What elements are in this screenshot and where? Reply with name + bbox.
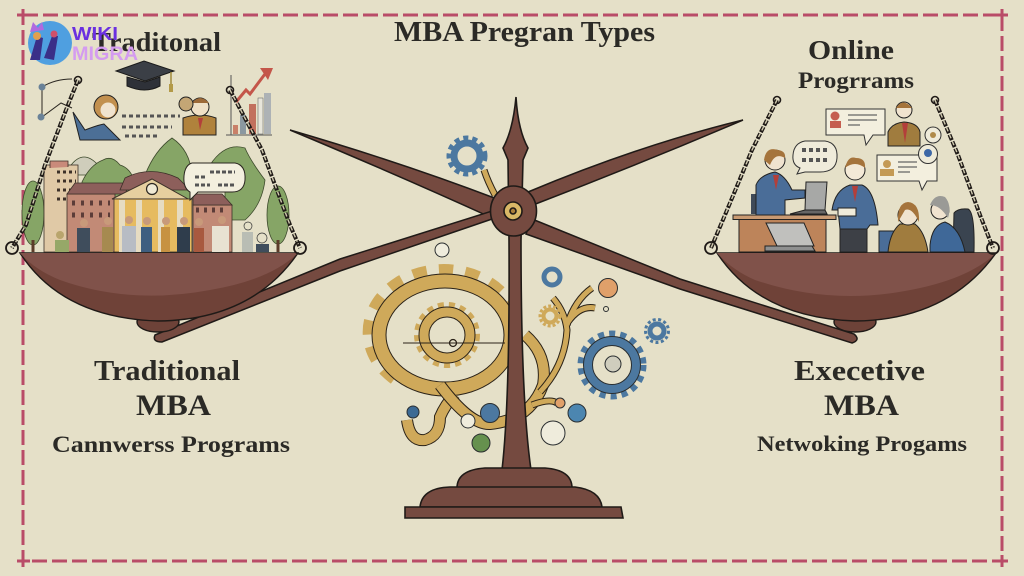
left chains: [6, 76, 306, 254]
bar chart with arrow: [226, 75, 272, 135]
bubble: chat: [793, 141, 837, 174]
red buildings: [67, 194, 115, 252]
gold gears and vines: [370, 170, 595, 440]
right pan: [717, 253, 996, 332]
heading: online programs: Progrrams: [798, 68, 914, 93]
title: MBA Pregran Types: [394, 17, 655, 48]
man with gear: [183, 115, 216, 135]
heading: executive MBA: Execetive: [794, 356, 925, 387]
bubble: profile two: [877, 155, 937, 190]
woman: [73, 112, 120, 140]
heading: traditional MBA: [52, 356, 290, 457]
standing man: [840, 227, 867, 252]
heading: traditional MBA: Cannwerss Programs: [52, 432, 290, 457]
seated woman and man: [879, 231, 894, 252]
laptop: [766, 223, 814, 246]
heading: traditional MBA: MBA: [136, 389, 211, 422]
temple: [120, 172, 190, 190]
heading: executive MBA: MBA: [824, 389, 899, 422]
left pan: [20, 253, 298, 332]
right chains: [705, 96, 999, 254]
tower: [44, 165, 78, 252]
right scene: online: [733, 102, 974, 252]
monitor: [805, 182, 827, 210]
scale arms: [154, 120, 857, 343]
logo: wiki migra: WIKI: [72, 24, 118, 44]
central pole and base: [405, 97, 623, 518]
logo: wiki migra: MIGRA: [72, 44, 138, 65]
man top: [888, 122, 920, 146]
graduation cap: [116, 61, 174, 81]
trees: [22, 138, 289, 252]
blue gears: [449, 138, 668, 396]
heading: executive MBA: Netwoking Progams: [757, 431, 967, 456]
logo: wiki migra: [28, 21, 138, 65]
network doodle: [42, 79, 72, 117]
left scene: campus: [22, 61, 289, 252]
formula notes: [122, 116, 180, 136]
man at desk: [751, 194, 759, 214]
desk: [739, 219, 826, 252]
bubble: profile: [826, 109, 885, 145]
speech bubble: [184, 163, 245, 200]
heading: executive MBA: [757, 356, 967, 456]
heading: traditional (top left): Traditonal: [92, 27, 222, 57]
small circles: [407, 243, 618, 452]
people group: [55, 216, 269, 252]
heading: traditional MBA: Traditional: [94, 356, 240, 387]
heading: online programs: Online: [808, 35, 894, 65]
heading: online programs: [798, 35, 914, 93]
